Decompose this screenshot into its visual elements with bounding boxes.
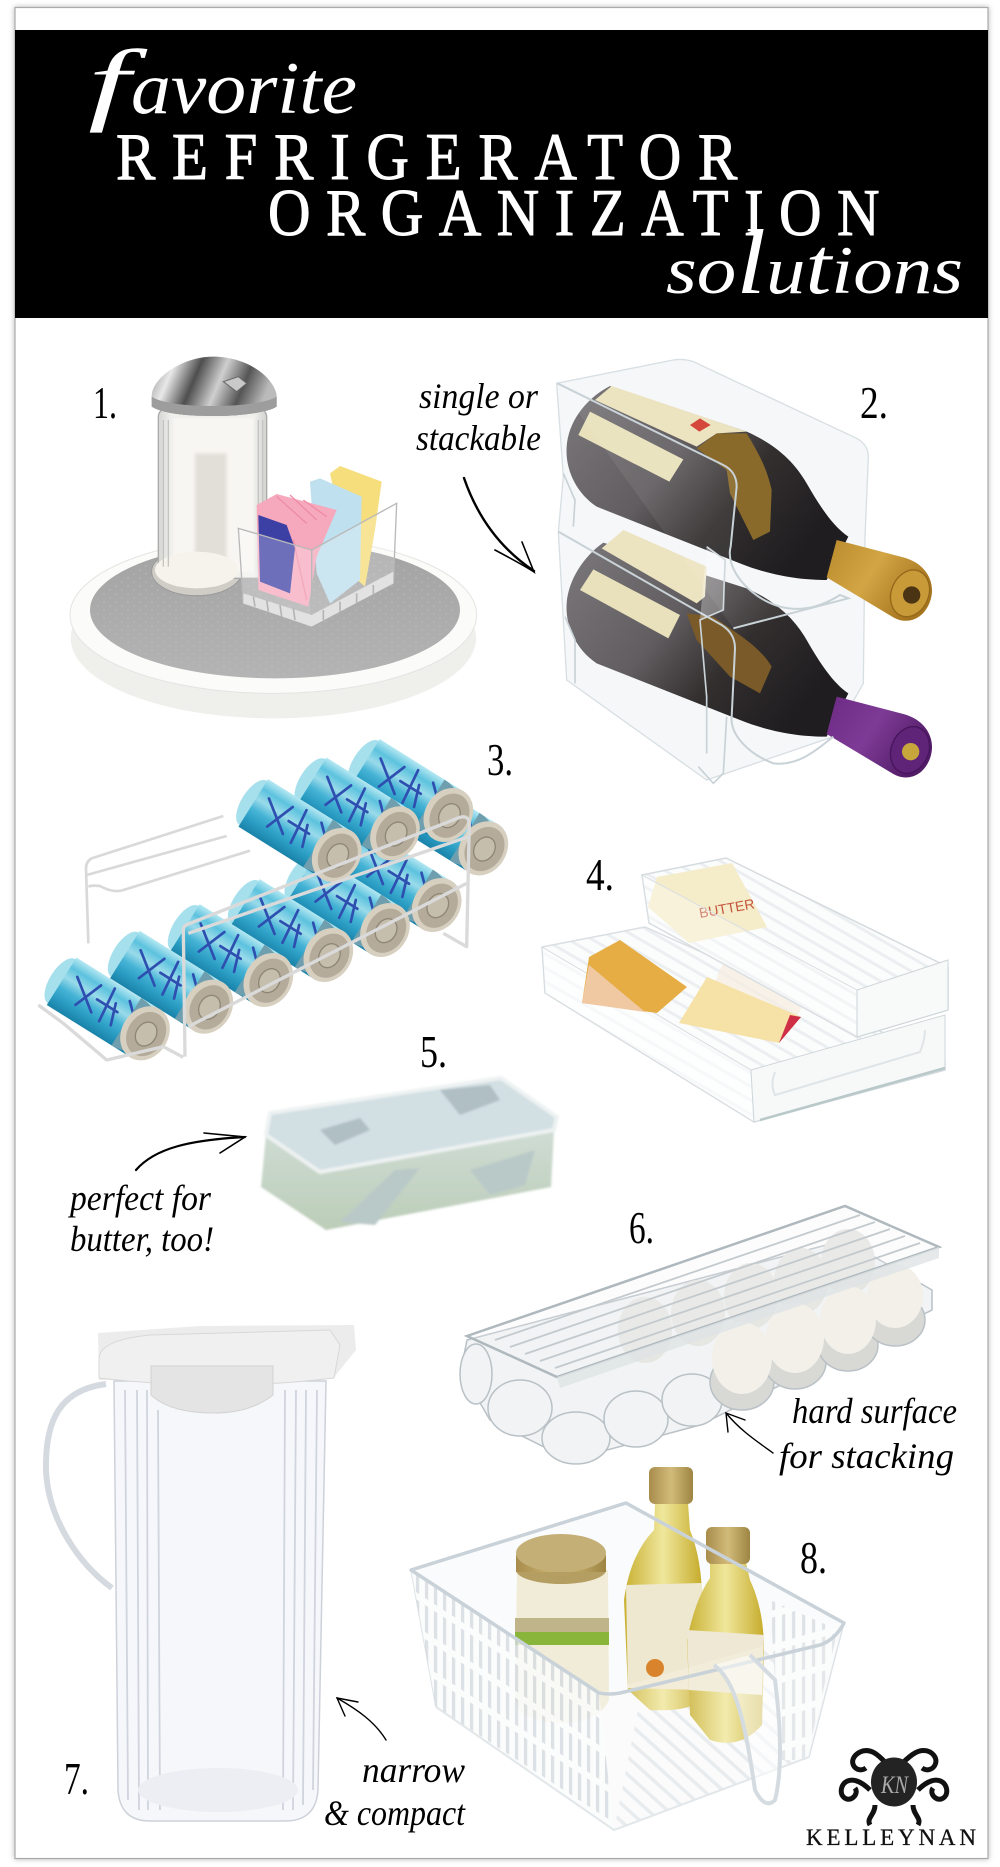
arrow to storage box xyxy=(136,1133,245,1170)
coconut oil jar xyxy=(515,1534,609,1723)
note: perfect for butter: butter, too! xyxy=(70,1219,214,1259)
cheese wedges xyxy=(582,940,805,1043)
monogram emblem xyxy=(841,1751,947,1825)
bottle with purple capsule xyxy=(567,530,936,779)
item 5: frosted storage box xyxy=(261,1078,557,1230)
item 3: can dispenser rack xyxy=(36,733,518,1070)
arrow to pitcher xyxy=(337,1698,386,1740)
shadows in lid xyxy=(320,1085,500,1145)
note: narrow and compact: & compact xyxy=(324,1793,466,1833)
item 6: egg tray with lid xyxy=(460,1206,939,1464)
note: single or stackable: stackable xyxy=(416,418,541,458)
title line: favorite: avorite xyxy=(131,48,357,130)
note: hard surface for stacking: for stacking xyxy=(779,1436,954,1476)
small bin with butter xyxy=(642,858,948,1037)
note: narrow and compact: narrow xyxy=(362,1750,465,1790)
note: single or stackable: single or xyxy=(419,376,539,416)
item 2: stacked wine racks xyxy=(557,359,936,783)
small oil bottle xyxy=(687,1527,764,1743)
number 2: 2. xyxy=(860,377,888,428)
brand logo xyxy=(806,1751,976,1850)
large bin xyxy=(542,927,945,1122)
item 7: narrow pitcher xyxy=(46,1325,356,1821)
front wire frame xyxy=(38,817,469,1060)
pitcher handle xyxy=(46,1384,112,1588)
title line: organization: ORGANIZATION xyxy=(268,176,880,250)
number 8: 8. xyxy=(800,1532,827,1583)
basket back and floor xyxy=(411,1503,844,1830)
pitcher body xyxy=(114,1381,326,1821)
title line: solutions: solutions xyxy=(666,211,963,313)
box lid xyxy=(266,1078,557,1172)
sugar shaker xyxy=(152,357,277,596)
note: perfect for butter xyxy=(67,1178,214,1259)
arrow to egg tray xyxy=(726,1413,773,1453)
number 5: 5. xyxy=(420,1026,447,1077)
basket handle xyxy=(714,1655,780,1803)
bottle with gold capsule xyxy=(567,386,936,623)
sweetener packets in glass holder xyxy=(238,466,397,627)
rack back walls xyxy=(557,359,868,780)
item 4: clear stacked fridge bins xyxy=(542,858,948,1122)
note: perfect for butter: perfect for xyxy=(67,1178,212,1218)
basket front walls and rim xyxy=(411,1503,844,1830)
ribbed lid xyxy=(467,1206,939,1388)
upper row of cans xyxy=(228,733,483,891)
monogram emblem: KN xyxy=(880,1772,909,1799)
rack rails and feet xyxy=(557,383,848,783)
wordmark: KELLEYNAN xyxy=(806,1825,976,1850)
eggs xyxy=(618,1229,923,1394)
box body xyxy=(261,1130,554,1230)
note: hard surface for stacking xyxy=(779,1391,957,1476)
number 1: 1. xyxy=(93,377,117,428)
title banner xyxy=(15,30,988,318)
note: narrow and compact xyxy=(324,1750,466,1833)
note: hard surface for stacking: hard surface xyxy=(792,1391,957,1431)
tray base and cups xyxy=(460,1240,932,1464)
small bin with butter: BUTTER xyxy=(698,895,756,921)
tall oil bottle xyxy=(624,1467,702,1710)
note: single or stackable xyxy=(416,376,541,458)
item 8: clear basket with oils xyxy=(411,1467,844,1830)
back wire frame xyxy=(86,816,250,943)
package label xyxy=(340,1150,535,1225)
number 3: 3. xyxy=(487,734,513,785)
number 4: 4. xyxy=(586,849,614,900)
turntable base xyxy=(70,537,477,718)
number 7: 7. xyxy=(64,1753,89,1804)
title line: refrigerator: REFRIGERATOR xyxy=(116,120,737,194)
number 6: 6. xyxy=(629,1202,654,1253)
lower row of cans xyxy=(36,766,518,1070)
pitcher lid xyxy=(98,1325,356,1413)
arrow to wine rack xyxy=(464,478,534,572)
title line: favorite: f xyxy=(88,31,149,133)
item 1: lazy susan turntable xyxy=(70,357,477,718)
